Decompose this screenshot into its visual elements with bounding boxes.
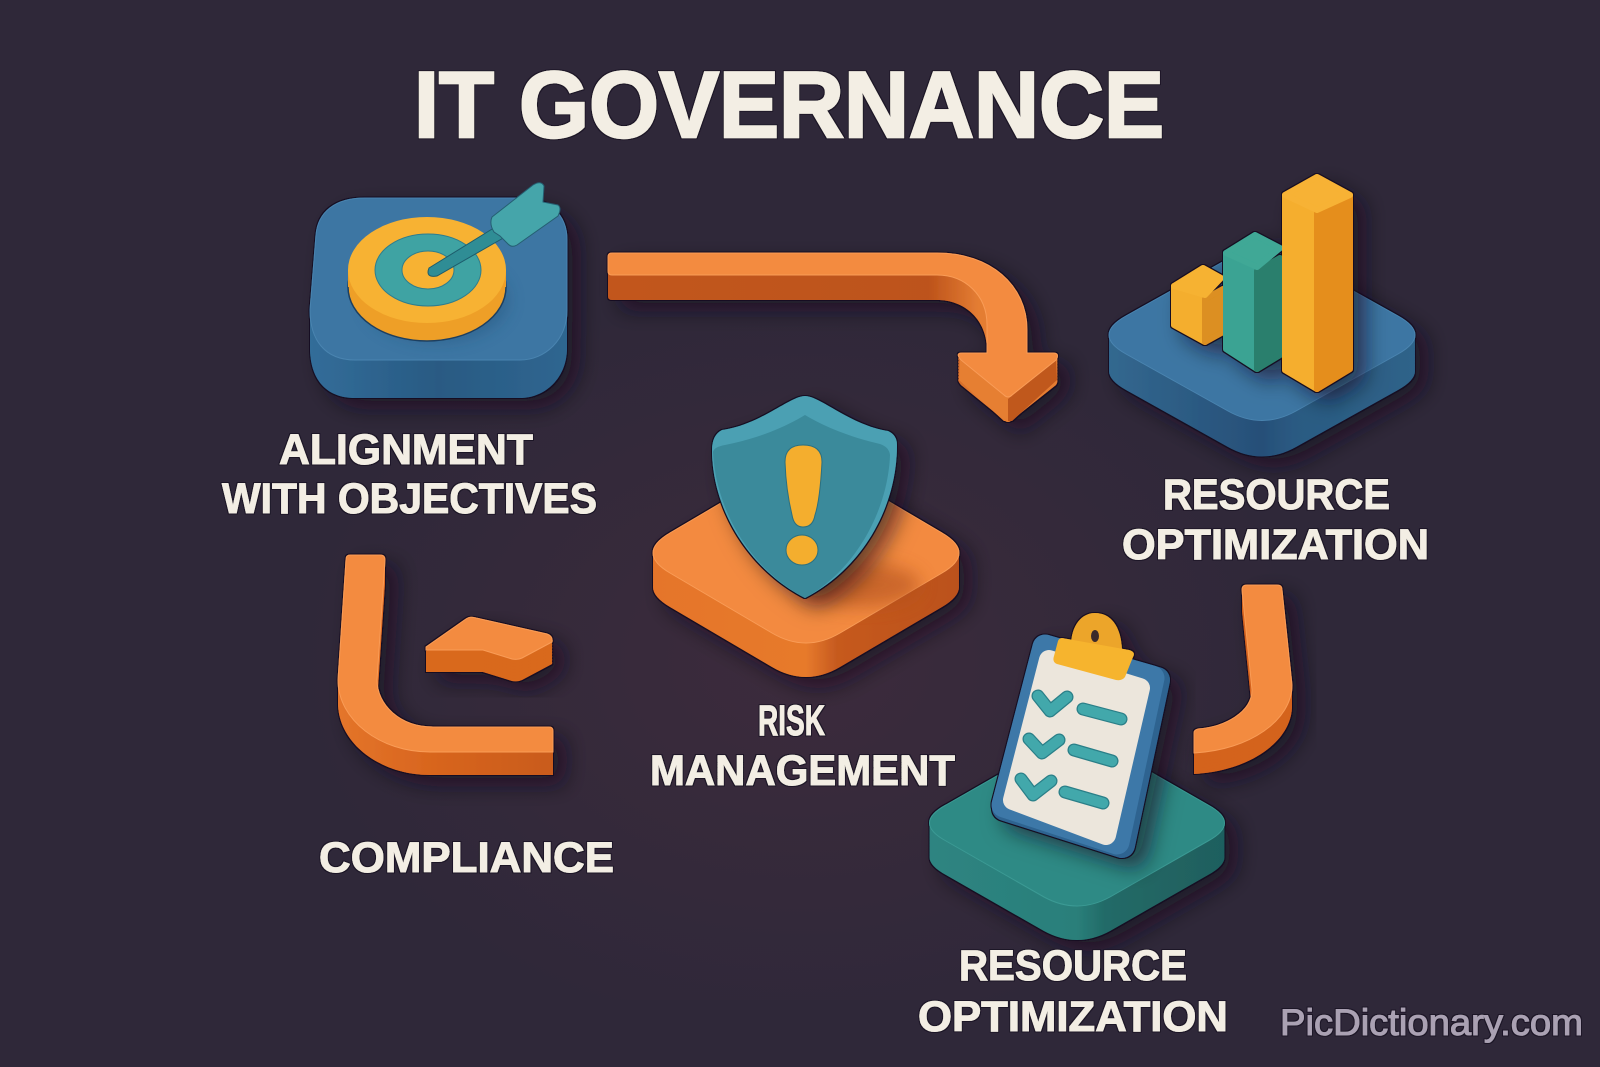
label: alignment with objectives: ALIGNMENT <box>279 426 533 474</box>
label: compliance: COMPLIANCE <box>319 834 614 882</box>
label: risk management: RISK <box>758 697 825 745</box>
tile: teal diamond platform <box>930 740 1224 940</box>
label: resource optimization (bottom): RESOURCE <box>959 942 1187 990</box>
label: resource optimization (top): OPTIMIZATION <box>1122 521 1429 569</box>
panel: risk management <box>653 396 959 677</box>
label: resource optimization (top): RESOURCE <box>1163 471 1390 519</box>
icon: target with dart <box>348 183 560 341</box>
label: risk management: MANAGEMENT <box>650 747 955 795</box>
tile: blue platform <box>310 198 567 398</box>
icon: shield with exclamation mark <box>712 396 897 598</box>
label: risk management <box>650 697 955 795</box>
watermark: PicDictionary.com <box>1280 1002 1583 1043</box>
panel: resource optimization checklist <box>930 613 1224 940</box>
tile: orange diamond platform <box>653 463 959 677</box>
label: alignment with objectives <box>222 426 597 523</box>
label: resource optimization (bottom) <box>918 942 1228 1041</box>
chart: 3D bars <box>1174 177 1350 389</box>
label: resource optimization (top) <box>1122 471 1429 569</box>
tile: blue diamond platform <box>1109 250 1415 456</box>
checklist <box>1021 696 1121 803</box>
arrow: alignment to resource optimization <box>608 253 1057 422</box>
panel: resource optimization chart <box>1109 177 1415 456</box>
arrow: compliance curve <box>338 555 553 775</box>
arrow: compliance arrowhead block <box>426 617 552 681</box>
icon: clipboard with checklist <box>1004 613 1157 845</box>
title: IT GOVERNANCE <box>414 52 1164 157</box>
label: resource optimization (bottom): OPTIMIZATION <box>918 993 1228 1041</box>
panel: alignment with objectives <box>310 183 567 398</box>
arrow: right curve <box>1194 585 1292 774</box>
clip <box>1053 613 1134 680</box>
label: alignment with objectives: WITH OBJECTIVES <box>222 475 597 523</box>
